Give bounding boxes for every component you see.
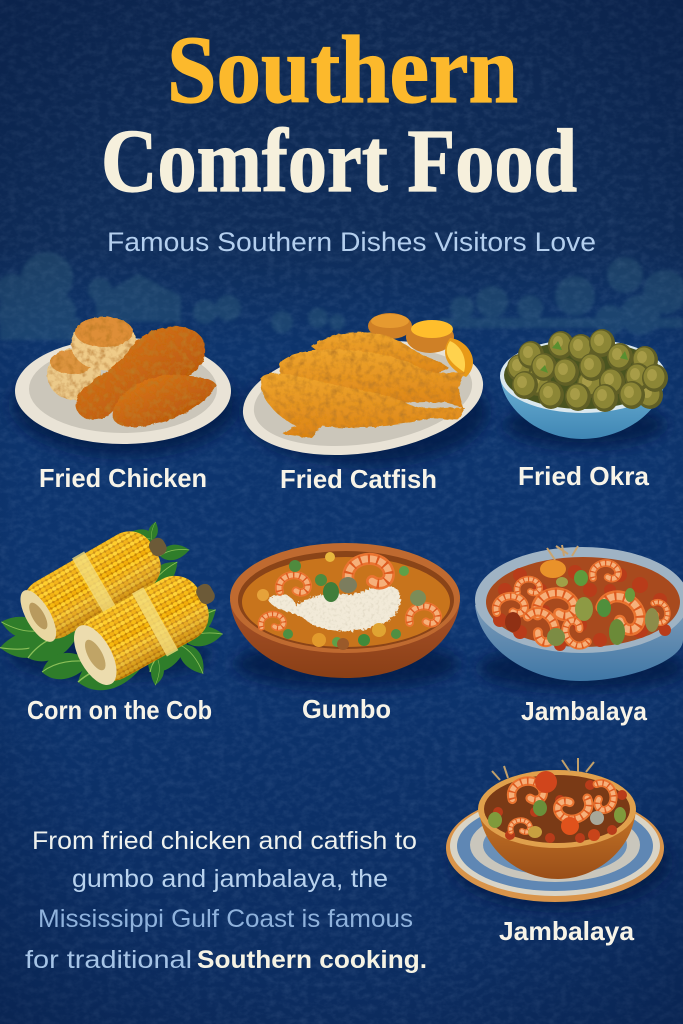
dish: jambalaya bowl xyxy=(475,545,683,690)
paragraph xyxy=(25,827,427,974)
paragraph: gumbo and jambalaya, the xyxy=(72,865,388,893)
plated jambalaya toppings xyxy=(488,758,627,843)
fish fillets xyxy=(261,332,465,438)
corn cob front xyxy=(64,559,230,694)
jambalaya toppings xyxy=(493,545,671,651)
corn cob back xyxy=(11,514,181,651)
paragraph: Southern cooking. xyxy=(197,946,427,974)
rice xyxy=(268,586,400,631)
lemon slices xyxy=(368,313,473,377)
dish: gumbo xyxy=(230,543,460,688)
label: Jambalaya on plate: Jambalaya xyxy=(499,916,635,946)
dish: fried chicken xyxy=(13,317,237,455)
shrimp and vegetables xyxy=(257,552,438,650)
dish: fried catfish xyxy=(236,313,490,469)
paragraph: From fried chicken and catfish to xyxy=(32,827,417,855)
label: Fried Catfish: Fried Catfish xyxy=(280,464,437,494)
background scenery: trees and house xyxy=(0,252,683,340)
label: Gumbo: Gumbo xyxy=(302,694,391,724)
dish: jambalaya on plate xyxy=(446,758,668,908)
label: Jambalaya: Jambalaya xyxy=(521,696,648,726)
label: Corn on the Cob: Corn on the Cob xyxy=(27,695,212,725)
okra pieces xyxy=(507,329,668,412)
paragraph: for traditional xyxy=(25,946,192,974)
subtitle: Famous Southern Dishes Visitors Love xyxy=(107,227,596,257)
label: Fried Okra: Fried Okra xyxy=(518,461,650,491)
paragraph: Mississippi Gulf Coast is famous xyxy=(38,905,413,933)
biscuits xyxy=(47,317,137,400)
dish: corn on the cob xyxy=(0,514,230,695)
dish: fried okra xyxy=(500,329,668,447)
title line: Comfort Food: Comfort Food xyxy=(101,112,577,211)
label: Fried Chicken: Fried Chicken xyxy=(39,463,207,493)
title line: Southern: Southern xyxy=(167,16,518,123)
leaves xyxy=(0,521,224,695)
drumstick and thigh xyxy=(76,326,216,427)
